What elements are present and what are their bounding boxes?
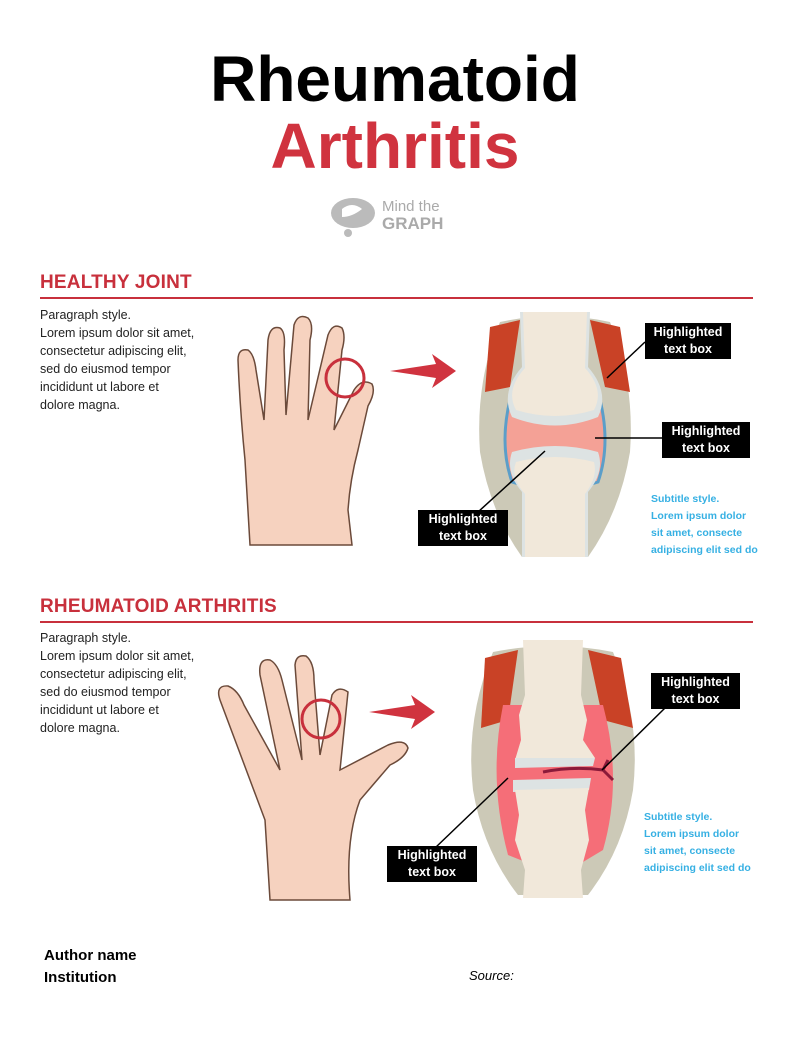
label 2b: Highlighted bbox=[398, 848, 466, 862]
paragraph 2: Lorem ipsum dolor sit amet, bbox=[40, 649, 194, 663]
label 1c: Highlighted bbox=[429, 512, 497, 526]
illustration: healthy joint bbox=[479, 312, 631, 557]
paragraph 1: consectetur adipiscing elit, bbox=[40, 344, 187, 358]
label 1a: Highlighted bbox=[654, 325, 722, 339]
title: Rheumatoid bbox=[210, 43, 580, 115]
paragraph 2: Paragraph style. bbox=[40, 631, 131, 645]
label 1a bbox=[645, 323, 731, 359]
paragraph 2: consectetur adipiscing elit, bbox=[40, 667, 187, 681]
source: Source: bbox=[469, 968, 514, 983]
illustration: arthritic hand bbox=[218, 655, 409, 901]
arrow 1 bbox=[390, 354, 456, 388]
paragraph 2 bbox=[40, 631, 194, 735]
illustration: healthy hand bbox=[237, 316, 374, 546]
author block: Author name bbox=[44, 947, 137, 964]
arrow 2 bbox=[369, 695, 435, 729]
paragraph 1: dolore magna. bbox=[40, 398, 120, 412]
label 2a bbox=[651, 673, 740, 709]
illustration: arthritic joint bbox=[471, 640, 635, 898]
label 1c: text box bbox=[439, 529, 487, 543]
label 2b: text box bbox=[408, 865, 456, 879]
paragraph 2: dolore magna. bbox=[40, 721, 120, 735]
subtitle 2: sit amet, consecte bbox=[644, 845, 735, 857]
paragraph 1: Lorem ipsum dolor sit amet, bbox=[40, 326, 194, 340]
label 1a: text box bbox=[664, 342, 712, 356]
label 1b bbox=[662, 422, 750, 458]
paragraph 1: Paragraph style. bbox=[40, 308, 131, 322]
subtitle 2: adipiscing elit sed do bbox=[644, 862, 751, 874]
label 1c bbox=[418, 510, 508, 546]
label 2a: Highlighted bbox=[661, 675, 730, 689]
subtitle 2 bbox=[644, 811, 751, 874]
heading: rheumatoid arthritis: RHEUMATOID ARTHRITIS bbox=[40, 596, 277, 617]
subtitle 1: Lorem ipsum dolor bbox=[651, 510, 746, 522]
heading: healthy joint: HEALTHY JOINT bbox=[40, 272, 192, 293]
subtitle 1: adipiscing elit sed do bbox=[651, 544, 758, 556]
label 2b bbox=[387, 846, 477, 882]
subtitle 1: sit amet, consecte bbox=[651, 527, 742, 539]
logo: Mind the Graph bbox=[331, 198, 443, 237]
label 2a: text box bbox=[672, 692, 719, 706]
label 1b: Highlighted bbox=[672, 424, 740, 438]
title bbox=[210, 43, 580, 182]
author block: Institution bbox=[44, 969, 116, 986]
paragraph 1: incididunt ut labore et bbox=[40, 380, 159, 394]
subtitle 2: Subtitle style. bbox=[644, 811, 712, 823]
subtitle 1 bbox=[651, 493, 758, 556]
paragraph 2: sed do eiusmod tempor bbox=[40, 685, 171, 699]
subtitle 2: Lorem ipsum dolor bbox=[644, 828, 739, 840]
author block bbox=[44, 947, 137, 986]
title: Arthritis bbox=[271, 110, 519, 182]
subtitle 1: Subtitle style. bbox=[651, 493, 719, 505]
paragraph 1 bbox=[40, 308, 194, 412]
paragraph 2: incididunt ut labore et bbox=[40, 703, 159, 717]
logo: Mind the Graph: GRAPH bbox=[382, 214, 443, 233]
label 1b: text box bbox=[682, 441, 730, 455]
logo: Mind the Graph: Mind the bbox=[382, 198, 440, 215]
paragraph 1: sed do eiusmod tempor bbox=[40, 362, 171, 376]
